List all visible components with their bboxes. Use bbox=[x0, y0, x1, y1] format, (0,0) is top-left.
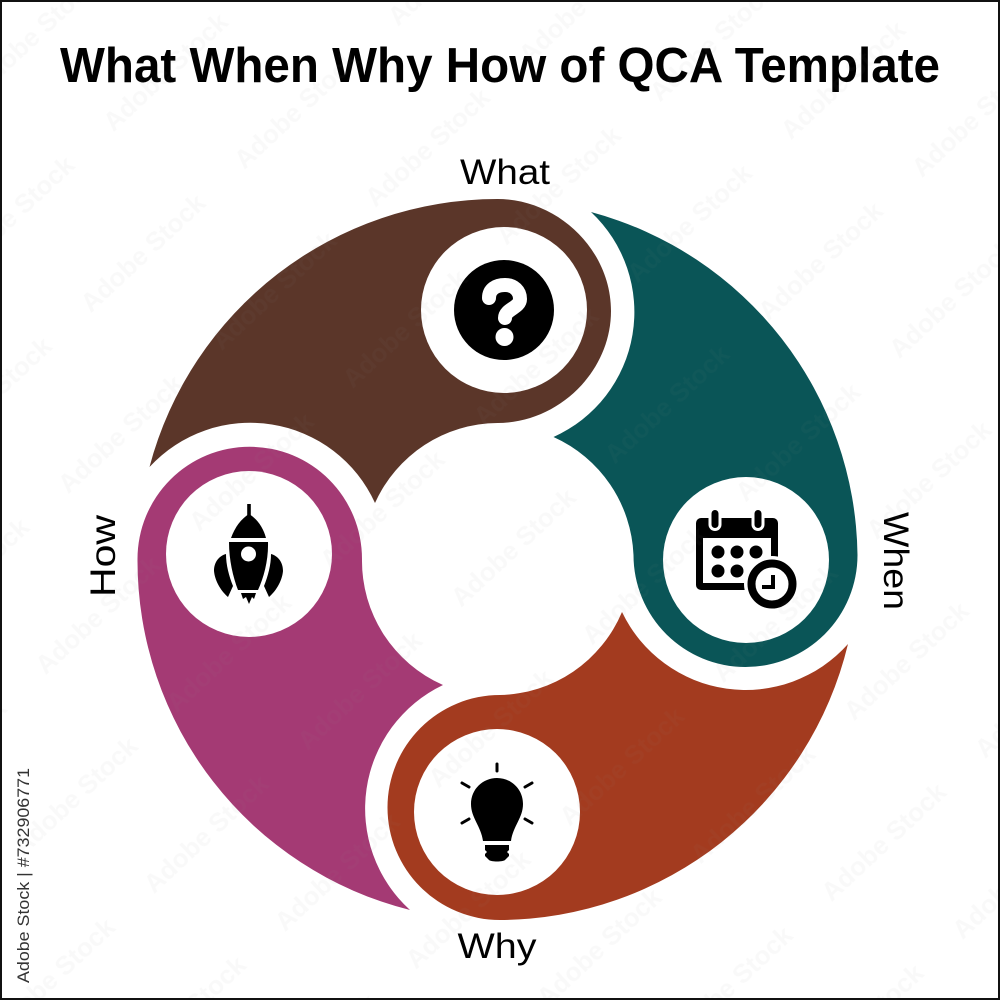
icon circle: When bbox=[663, 477, 829, 643]
segment: Why (rust) bbox=[388, 612, 848, 920]
credit line: stock id: Adobe Stock | #732906771 bbox=[14, 768, 33, 983]
icon circle: How bbox=[166, 471, 332, 637]
icon circle: What bbox=[421, 227, 587, 393]
segment: When (teal) bbox=[554, 212, 858, 667]
icon: lightbulb bbox=[462, 764, 532, 862]
icon: calendar with clock bbox=[696, 507, 800, 612]
title: What When Why How of QCA Template bbox=[60, 39, 940, 93]
segment: What (brown) bbox=[150, 199, 611, 503]
segment: How (purple) bbox=[137, 447, 443, 910]
label: When: When bbox=[876, 512, 915, 610]
label: How: How bbox=[84, 514, 123, 597]
icon circle: Why bbox=[414, 729, 580, 895]
label: What: What bbox=[460, 153, 550, 192]
icon: question mark bbox=[454, 260, 554, 360]
icon: rocket bbox=[214, 504, 283, 604]
label: Why: Why bbox=[458, 927, 537, 966]
